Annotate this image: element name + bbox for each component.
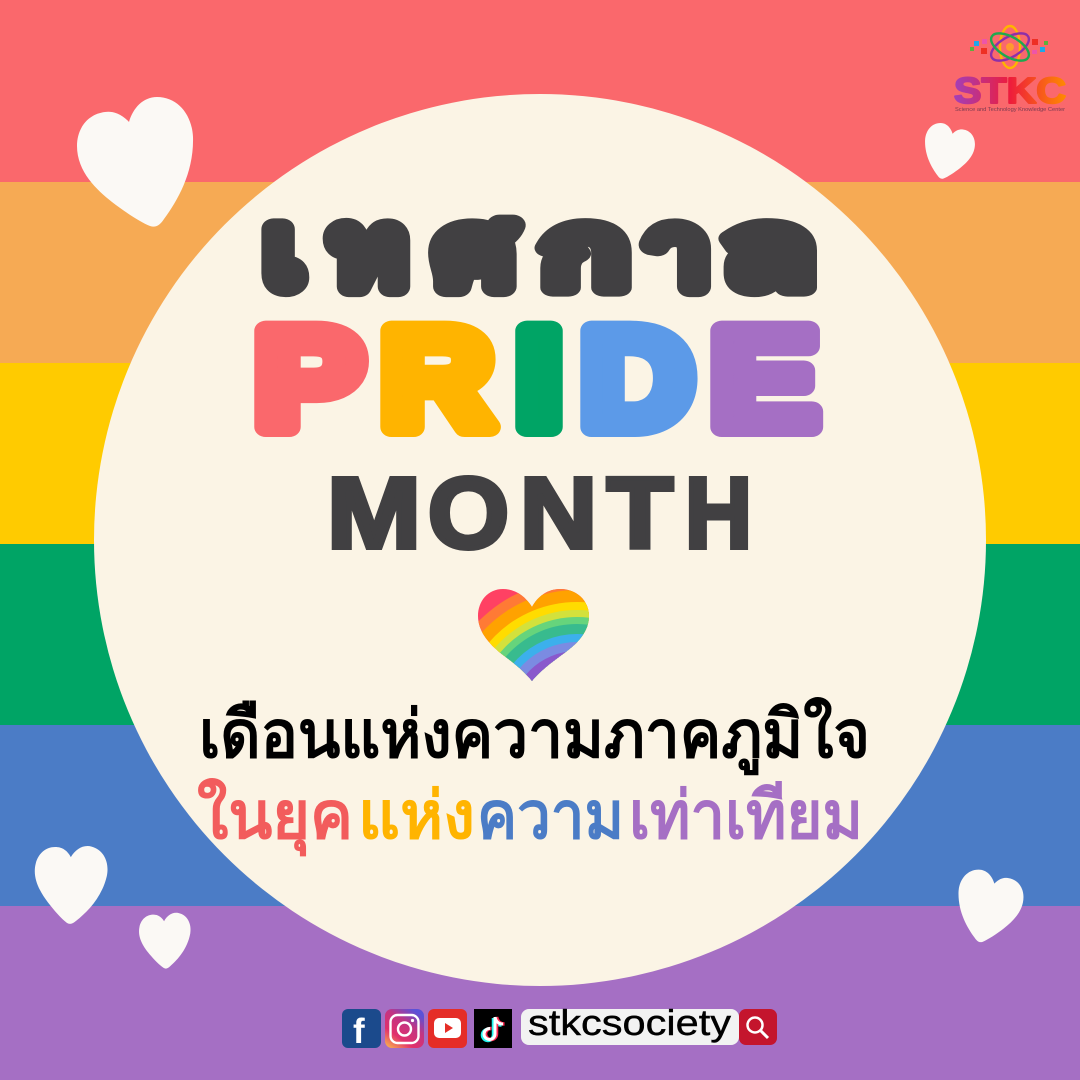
title: PRIDE: P xyxy=(255,300,363,457)
subtitle line 2: แห่ง xyxy=(358,778,475,852)
title: เทศกาล: ท xyxy=(331,194,406,308)
title: MONTH: M xyxy=(327,458,421,570)
icon: instagram xyxy=(385,1009,424,1048)
icon: white heart bottom left small xyxy=(132,906,194,972)
title: เทศกาล: ล xyxy=(723,194,814,308)
logo tagline: Science and Technology Knowledge Center xyxy=(955,107,1065,113)
icon: atom xyxy=(970,26,1048,68)
title: PRIDE: E xyxy=(711,300,818,457)
icon: rainbow heart xyxy=(478,589,589,681)
title: เทศกาล: เ xyxy=(264,194,304,308)
icon: tiktok xyxy=(474,1009,512,1048)
logo wordmark: STKC xyxy=(954,70,1066,111)
title: MONTH: T xyxy=(607,458,673,570)
title: เทศกาล: ศ xyxy=(435,194,516,308)
title: เทศกาล xyxy=(264,194,814,308)
title: PRIDE: D xyxy=(581,300,693,457)
central cream circle panel xyxy=(94,94,986,986)
icon: white heart bottom right xyxy=(958,870,1023,942)
social media bar xyxy=(342,1002,777,1051)
subtitle line 1: เดือนแห่งความภาคภูมิใจ xyxy=(199,695,870,776)
icon: white heart top right xyxy=(925,123,975,179)
subtitle line 2: ความ xyxy=(477,778,624,852)
icon: facebook: f xyxy=(353,1012,365,1051)
title: เทศกาล: า xyxy=(643,194,710,308)
icon: white heart bottom left large xyxy=(23,834,113,930)
search box xyxy=(521,1009,739,1045)
title: PRIDE: I xyxy=(516,300,562,457)
title: PRIDE: R xyxy=(381,300,493,457)
icon: white heart top left xyxy=(77,97,193,227)
subtitle line 2: ในยุค xyxy=(197,776,353,857)
handle: stkcsociety: stkcsociety xyxy=(528,1002,731,1043)
subtitle line 2 xyxy=(197,776,863,857)
title: MONTH: H xyxy=(685,458,752,570)
title: เทศกาล: ก xyxy=(542,194,628,308)
title: MONTH: O xyxy=(428,458,509,570)
subtitle line 2: เท่าเทียม xyxy=(629,778,863,852)
icon: search button xyxy=(739,1009,777,1045)
title: MONTH xyxy=(327,458,752,570)
logo: STKC xyxy=(954,26,1066,113)
icon: facebook xyxy=(342,1009,381,1051)
title: PRIDE xyxy=(255,300,818,457)
icon: youtube xyxy=(428,1009,467,1048)
title: MONTH: N xyxy=(520,458,597,570)
